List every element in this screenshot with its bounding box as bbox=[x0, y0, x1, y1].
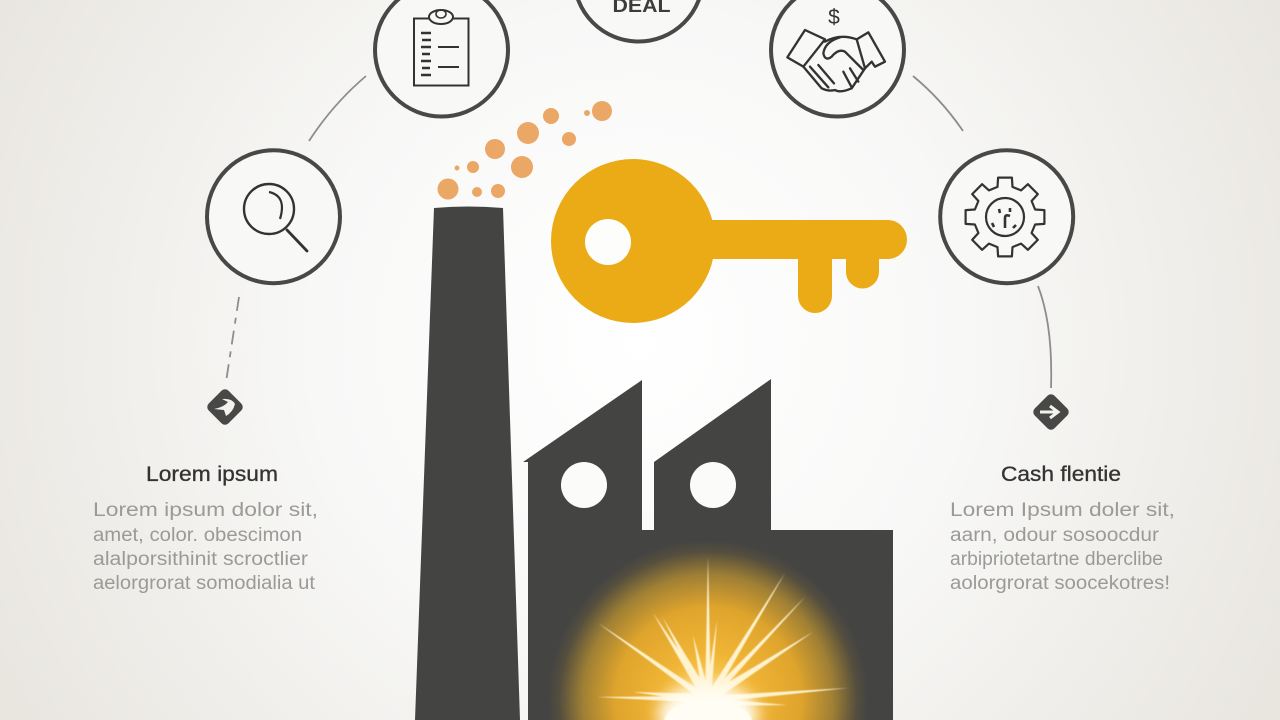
icon circle: checklist bbox=[375, 0, 508, 116]
right heading: Cash flentie bbox=[1001, 463, 1121, 486]
right text block: aarn, odour sosoocdur bbox=[950, 525, 1160, 546]
left heading: Lorem ipsum bbox=[146, 463, 278, 486]
right text block bbox=[950, 500, 1175, 594]
diamond marker right bbox=[1031, 392, 1071, 432]
icon circle: gear bbox=[940, 150, 1073, 283]
left text block: alalporsithinit scroctlier bbox=[93, 549, 309, 570]
icon circle: deal bbox=[574, 0, 703, 42]
left text block bbox=[93, 500, 318, 594]
icon circle: handshake: $ bbox=[828, 6, 840, 29]
glowing light bbox=[548, 540, 868, 720]
right text block: aolorgrorat soocekotres! bbox=[950, 573, 1170, 594]
icon circle: search bbox=[207, 150, 340, 283]
left text block: amet, color. obescimon bbox=[93, 525, 302, 546]
smoke puffs bbox=[438, 101, 612, 200]
right text block: arbipriotetartne dberclibe bbox=[950, 549, 1163, 570]
chimney bbox=[415, 206, 520, 720]
diamond marker left bbox=[205, 387, 245, 427]
factory bbox=[523, 379, 893, 720]
icon circle: handshake bbox=[771, 0, 904, 116]
right text block: Lorem Ipsum doler sit, bbox=[950, 500, 1175, 521]
left text block: Lorem ipsum dolor sit, bbox=[93, 500, 318, 521]
left text block: aelorgrorat somodialia ut bbox=[93, 573, 316, 594]
connector arcs bbox=[226, 76, 1051, 388]
key bbox=[551, 159, 907, 323]
